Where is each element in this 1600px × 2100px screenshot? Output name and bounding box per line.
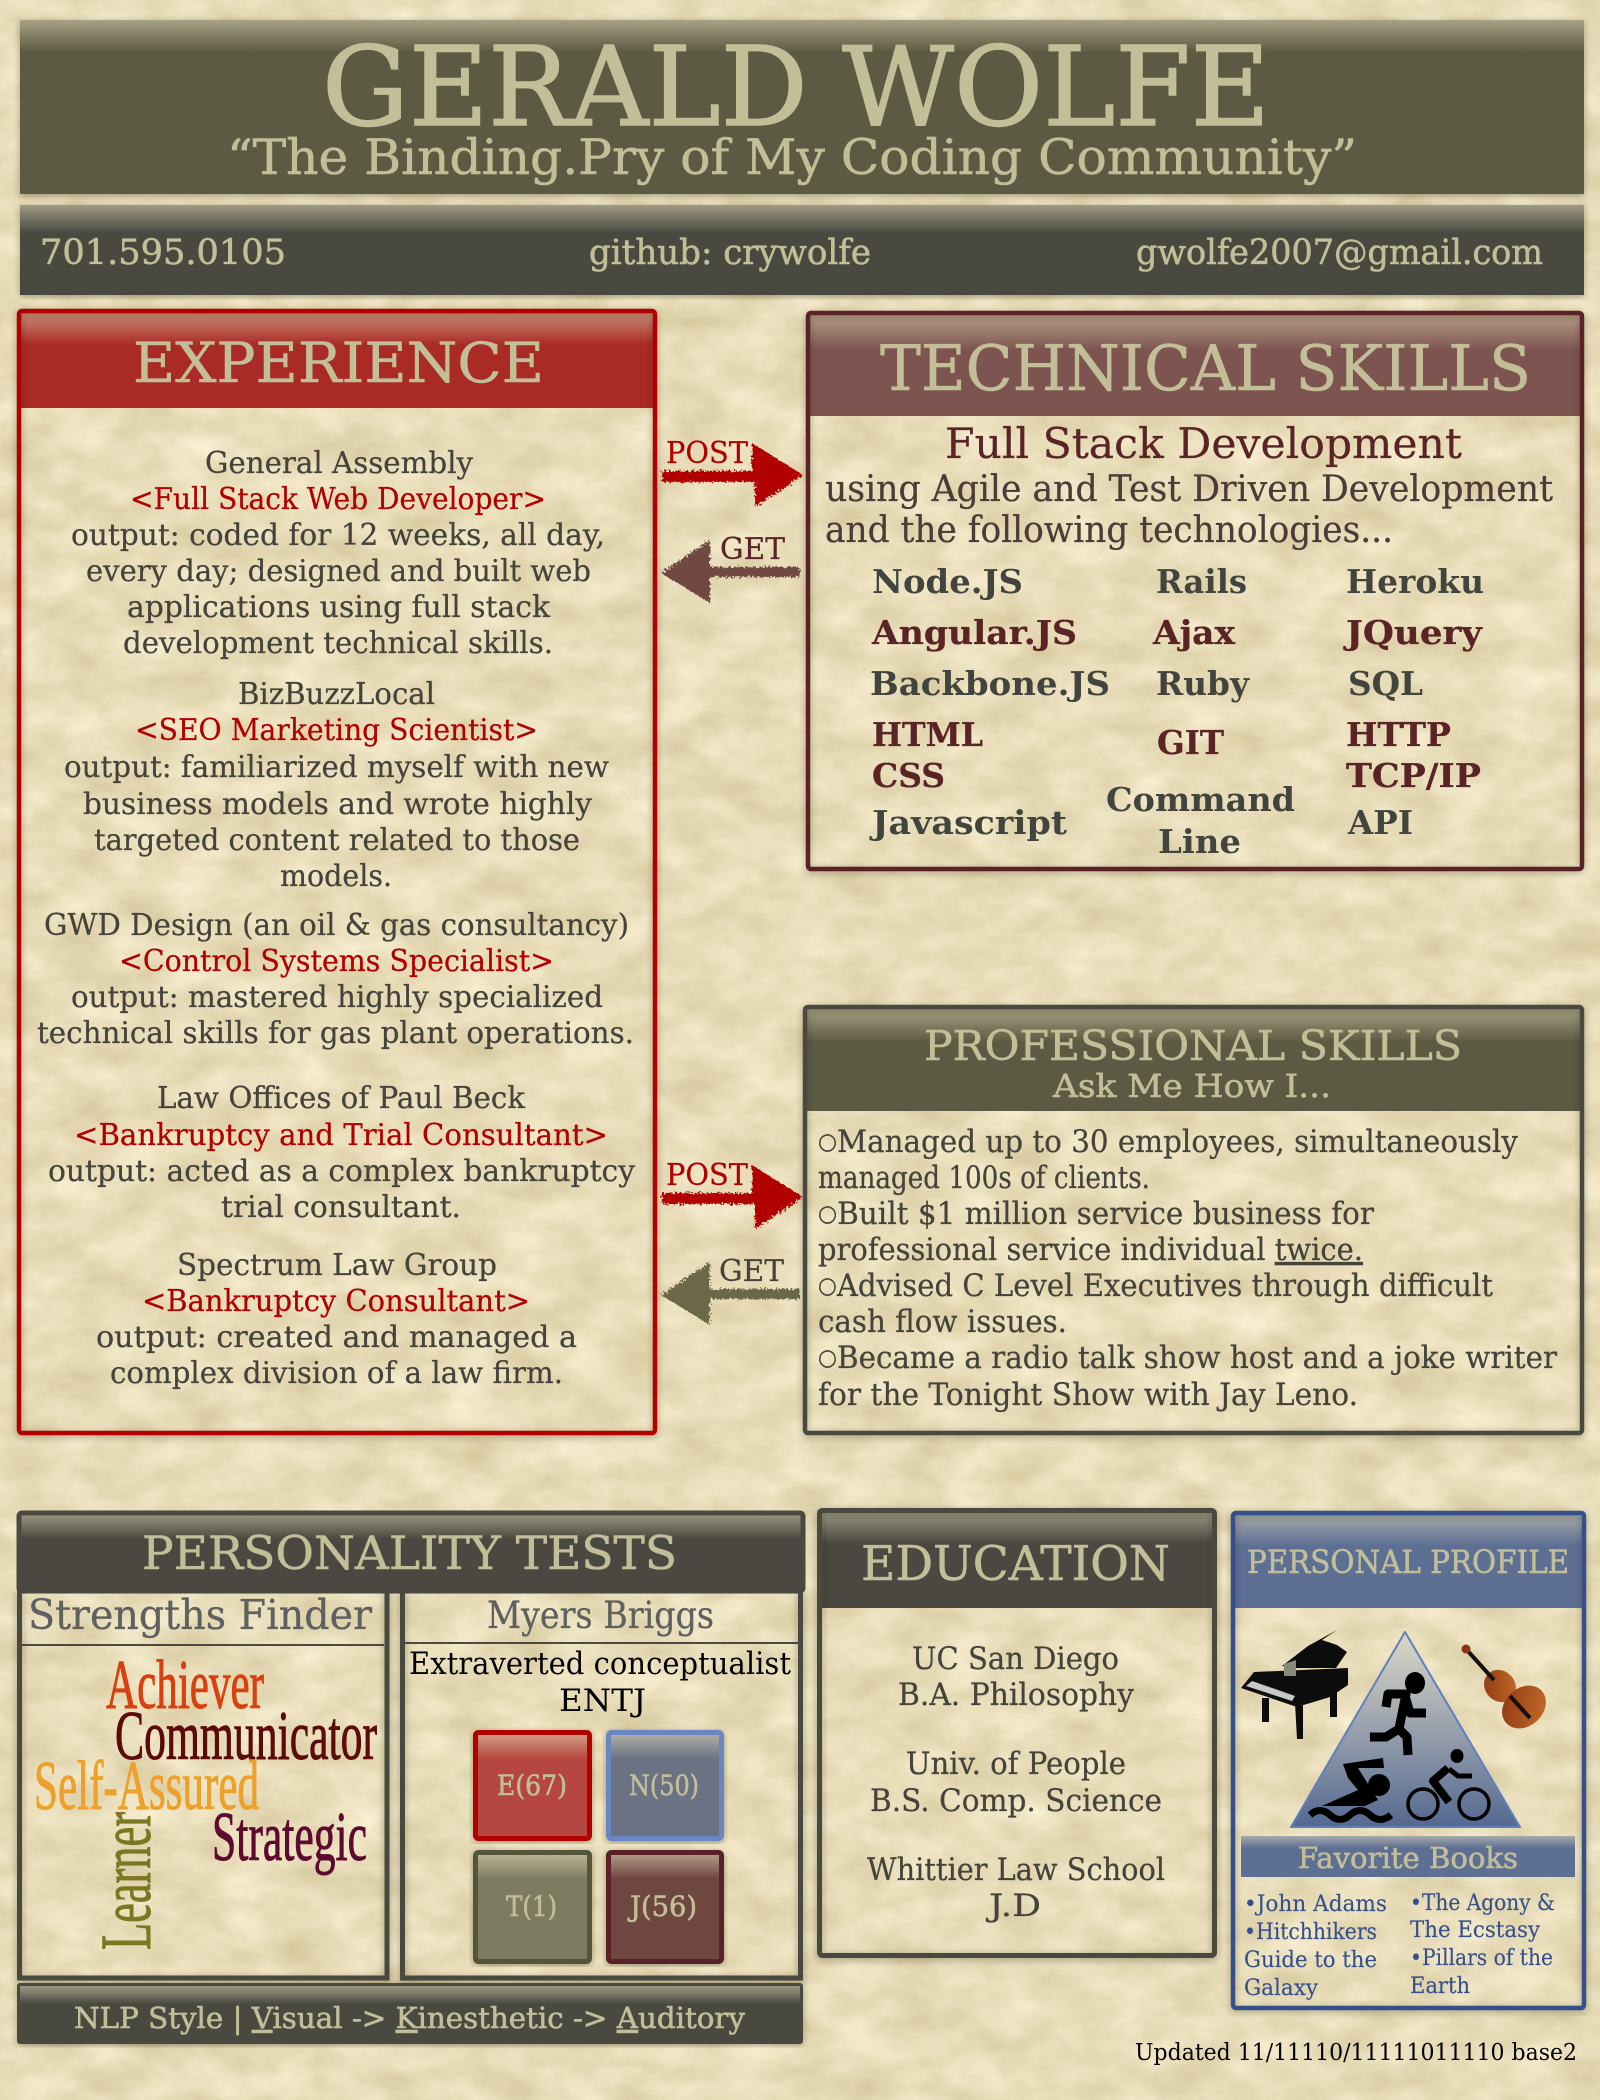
job: General Assembly: development technical skills.	[123, 626, 553, 661]
book list: right column: •Pillars of the	[1410, 1946, 1553, 1971]
panel: technical skills	[808, 313, 1582, 869]
skills list: managed 100s of clients.	[818, 1160, 1150, 1196]
job: General Assembly: applications using full stack	[127, 590, 551, 625]
technology list: Node.JS	[872, 562, 1023, 601]
job: Law Offices of Paul Beck: trial consultant.	[221, 1190, 461, 1225]
job: BizBuzzLocal: <SEO Marketing Scientist>	[135, 713, 538, 748]
technology list: CSS	[872, 756, 945, 795]
job: Law Offices of Paul Beck	[48, 1081, 635, 1225]
arrow: POST to technical skills	[662, 436, 803, 507]
icon: swimmer	[1310, 1758, 1391, 1820]
skills list: Became a radio talk show host and a joke writer	[837, 1340, 1557, 1376]
technology list: Ajax	[1152, 613, 1235, 652]
job: Law Offices of Paul Beck: <Bankruptcy and Trial Consultant>	[74, 1118, 608, 1153]
email: gwolfe2007@gmail.com	[1136, 233, 1543, 273]
icon: violin	[1462, 1644, 1555, 1737]
intro text: and the following technologies...	[825, 510, 1393, 551]
book list: right column	[1410, 1891, 1555, 1999]
skills list: Built $1 million service business for	[837, 1196, 1374, 1232]
school: Univ. of People	[870, 1746, 1162, 1819]
technology list: SQL	[1348, 664, 1423, 703]
job: Spectrum Law Group: Spectrum Law Group	[177, 1248, 497, 1283]
trait: E	[476, 1732, 590, 1838]
word cloud: Learner	[86, 1812, 166, 1950]
job: Spectrum Law Group: output: created and managed a	[96, 1320, 577, 1355]
header: name and tagline	[20, 20, 1584, 194]
github: github: crywolfe	[589, 233, 871, 273]
trait: N	[608, 1732, 722, 1838]
panel: experience	[19, 311, 655, 1433]
icon: cyclist	[1408, 1749, 1489, 1819]
skills list	[818, 1124, 1557, 1413]
job: BizBuzzLocal: models.	[280, 859, 392, 894]
school: Whittier Law School: J.D	[986, 1888, 1041, 1924]
technology list: Ruby	[1156, 664, 1250, 703]
subheading: Ask Me How I...	[1052, 1067, 1331, 1105]
job: BizBuzzLocal: output: familiarized myself with new	[64, 750, 609, 785]
school: Whittier Law School: Whittier Law School	[867, 1852, 1165, 1888]
skills list: ○	[818, 1129, 837, 1155]
NLP style bar	[17, 1983, 803, 2044]
job: General Assembly: <Full Stack Web Developer>	[130, 482, 546, 517]
arrow: GET from professional skills	[661, 1254, 800, 1325]
heading: PERSONALITY TESTS	[142, 1526, 677, 1580]
technology list: Heroku	[1346, 562, 1484, 601]
book list: right column: The Ecstasy	[1410, 1918, 1541, 1943]
job: General Assembly: every day; designed and built web	[86, 554, 591, 589]
job: GWD Design: technical skills for gas plant operations.	[37, 1016, 634, 1051]
school: UC San Diego	[898, 1641, 1134, 1713]
sub-panel: myers briggs: Extraverted conceptualist	[409, 1646, 791, 1682]
contact bar	[20, 205, 1584, 295]
book list: left column: Guide to the	[1244, 1948, 1377, 1973]
update note: Updated 11/11110/11111011110 base2	[1135, 2040, 1577, 2066]
technology list: JQuery	[1343, 613, 1483, 652]
heading: PROFESSIONAL SKILLS	[924, 1022, 1462, 1070]
intro text: using Agile and Test Driven Development	[825, 469, 1554, 510]
arrow: GET from technical skills	[661, 532, 800, 603]
technology list: Backbone.JS	[870, 664, 1110, 703]
technology list: TCP/IP	[1346, 756, 1481, 795]
skills list: professional service individual twice.	[818, 1232, 1363, 1268]
skills list: for the Tonight Show with Jay Leno.	[818, 1377, 1358, 1413]
skills list: Advised C Level Executives through difficult	[836, 1268, 1493, 1304]
intro text	[825, 469, 1554, 551]
skills list: Managed up to 30 employees, simultaneously	[837, 1124, 1518, 1160]
book list: right column: •The Agony &	[1410, 1891, 1555, 1916]
job: Law Offices of Paul Beck: output: acted as a complex bankruptcy	[48, 1154, 635, 1189]
arrow: POST to professional skills: POST	[666, 1158, 748, 1193]
school: UC San Diego: UC San Diego	[912, 1641, 1119, 1677]
school: Whittier Law School	[867, 1852, 1165, 1924]
job: Law Offices of Paul Beck: Law Offices of Paul Beck	[157, 1081, 526, 1116]
icon: grand piano	[1241, 1630, 1348, 1739]
trait: E: E(67)	[497, 1769, 567, 1802]
panel: professional skills	[805, 1007, 1582, 1433]
technology list: Command	[1106, 780, 1295, 819]
panel: education	[820, 1510, 1214, 1956]
sub-panel: myers briggs	[402, 1591, 800, 1978]
word cloud: Self-Assured	[34, 1748, 259, 1825]
school: Univ. of People: Univ. of People	[906, 1746, 1126, 1782]
word cloud: Achiever	[106, 1647, 264, 1724]
heading: PERSONAL PROFILE	[1247, 1543, 1569, 1581]
heading: TECHNICAL SKILLS	[880, 332, 1531, 405]
panel: personality tests	[19, 1513, 803, 1978]
technology list: HTTP	[1346, 715, 1451, 754]
school: UC San Diego: B.A. Philosophy	[898, 1677, 1134, 1713]
trait: J: J(56)	[627, 1890, 697, 1923]
sub-panel: strengths finder	[20, 1591, 387, 1978]
NLP style bar: NLP Style | Visual -> Kinesthetic -> Auditory	[74, 2001, 746, 2035]
job: GWD Design: <Control Systems Specialist>	[119, 944, 554, 979]
icon: triathlon triangle	[1291, 1632, 1520, 1827]
sub-panel: strengths finder: Strengths Finder	[28, 1591, 372, 1639]
job: General Assembly	[71, 446, 605, 661]
technology list: Javascript	[869, 803, 1068, 842]
job: Spectrum Law Group: complex division of a law firm.	[110, 1356, 563, 1391]
arrow: GET from professional skills: GET	[719, 1254, 784, 1289]
arrow: POST to professional skills	[662, 1158, 803, 1229]
arrow: POST to technical skills: POST	[666, 436, 748, 471]
skills list: ○	[818, 1345, 837, 1371]
panel: personal profile	[1233, 1513, 1584, 2008]
arrow: GET from technical skills: GET	[720, 532, 785, 567]
word cloud	[34, 1647, 377, 1950]
school: Univ. of People: B.S. Comp. Science	[870, 1783, 1162, 1819]
trait: N: N(50)	[629, 1769, 699, 1802]
job: General Assembly: General Assembly	[205, 446, 473, 481]
trait: J	[608, 1852, 722, 1962]
book list: left column	[1244, 1892, 1387, 2001]
skills list: ○	[818, 1201, 837, 1227]
book list: right column: Earth	[1410, 1974, 1470, 1999]
job: BizBuzzLocal: BizBuzzLocal	[238, 677, 435, 712]
favorite books bar: Favorite Books	[1298, 1841, 1518, 1875]
tagline: “The Binding.Pry of My Coding Community”	[227, 129, 1357, 186]
job: Spectrum Law Group: <Bankruptcy Consultant>	[142, 1284, 530, 1319]
job: General Assembly: output: coded for 12 weeks, all day,	[71, 518, 605, 553]
subheading: Full Stack Development	[945, 419, 1462, 468]
sub-panel: myers briggs: Myers Briggs	[487, 1594, 714, 1637]
job: GWD Design: GWD Design (an oil & gas consultancy)	[44, 908, 629, 943]
trait: T	[476, 1852, 590, 1962]
technology list: Angular.JS	[871, 613, 1077, 652]
favorite books bar	[1241, 1836, 1575, 1877]
technology list: GIT	[1157, 723, 1224, 762]
book list: left column: •Hitchhikers	[1244, 1920, 1377, 1945]
technology list: Line	[1158, 822, 1241, 861]
trait: T: T(1)	[506, 1890, 557, 1923]
sub-panel: myers briggs: ENTJ	[559, 1683, 646, 1719]
technology list: Rails	[1156, 562, 1247, 601]
job: BizBuzzLocal: business models and wrote highly	[83, 787, 592, 822]
title: GERALD WOLFE	[322, 23, 1270, 151]
book list: left column: Galaxy	[1244, 1976, 1319, 2001]
skills list: cash flow issues.	[818, 1304, 1067, 1340]
technology list	[869, 562, 1484, 861]
job: BizBuzzLocal: targeted content related to those	[94, 823, 580, 858]
heading: EDUCATION	[861, 1536, 1170, 1592]
technology list: API	[1347, 803, 1413, 842]
skills list: ○	[818, 1273, 837, 1299]
job: GWD Design	[37, 908, 634, 1051]
book list: left column: •John Adams	[1244, 1892, 1387, 1917]
job: BizBuzzLocal	[64, 677, 609, 894]
job: GWD Design: output: mastered highly specialized	[71, 980, 603, 1015]
icon: runner	[1370, 1672, 1426, 1755]
word cloud: Strategic	[212, 1799, 367, 1876]
heading: EXPERIENCE	[133, 331, 544, 395]
phone: 701.595.0105	[40, 233, 286, 273]
job: Spectrum Law Group	[96, 1248, 577, 1391]
word cloud: Communicator	[115, 1698, 377, 1775]
technology list: HTML	[872, 715, 983, 754]
